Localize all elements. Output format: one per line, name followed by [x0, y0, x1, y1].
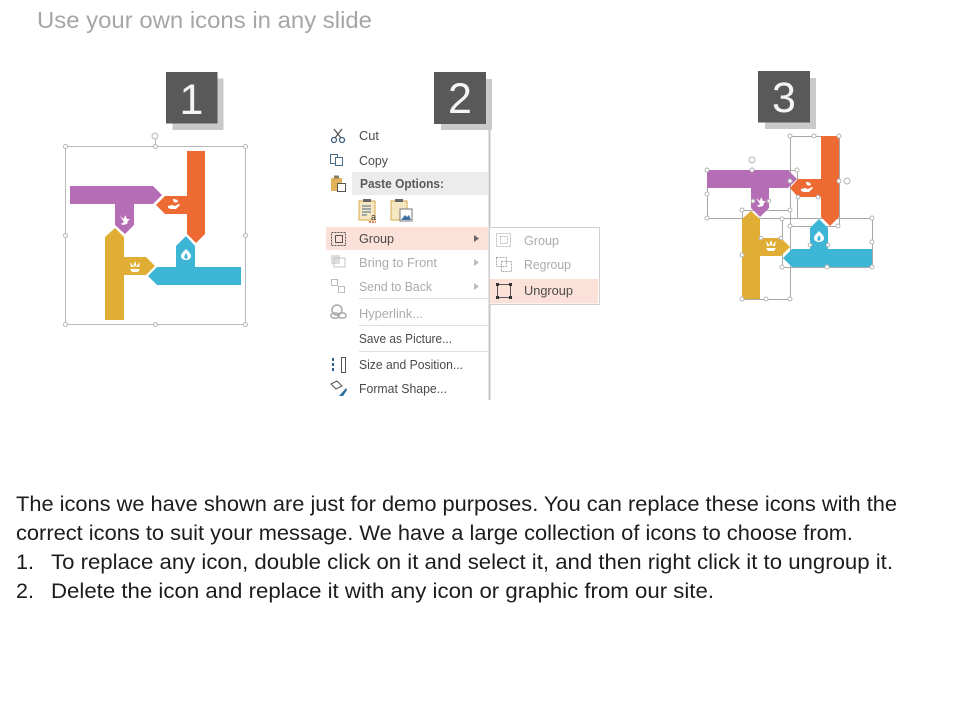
- menu item: Save as Picture: Save as Picture...: [359, 331, 452, 346]
- icon: send to back: [332, 280, 344, 292]
- orange arrow: [156, 151, 205, 243]
- menu item: Size and Position: Size and Position...: [359, 357, 463, 372]
- menu item: Cut: Cut: [359, 128, 379, 143]
- yellow arrow: [742, 211, 790, 299]
- icon: paste picture: [391, 199, 412, 221]
- menu item: Bring to Front: Bring to Front: [359, 255, 437, 270]
- menu item: Hyperlink: Hyperlink...: [359, 306, 423, 321]
- menu item: Copy: Copy: [359, 153, 388, 168]
- blue arrow: [783, 219, 872, 267]
- title: Use your own icons in any slide: [37, 7, 372, 33]
- number badge 1: 1: [180, 76, 203, 124]
- body text block: Delete the icon and replace it with any icon or graphic from our site.: [51, 579, 714, 603]
- menu item: Format Shape: Format Shape...: [359, 381, 447, 396]
- menu vertical edge: [488, 124, 490, 400]
- icon: format shape: [331, 381, 347, 396]
- icon: paste: [331, 176, 346, 192]
- icon: hyperlink: [331, 305, 346, 318]
- submenu panel: Ungroup: [524, 283, 573, 298]
- paste options header: Paste Options:: [360, 176, 444, 191]
- menu item: Send to Back: Send to Back: [359, 279, 432, 294]
- orange arrow: [790, 136, 839, 226]
- panel: step 3 ungrouped graphic: [705, 71, 874, 301]
- yellow arrow: [105, 228, 155, 320]
- body text block: 2.: [16, 579, 34, 603]
- selection frame: [64, 133, 248, 326]
- submenu panel: Regroup: [524, 257, 571, 272]
- submenu panel: Group: [524, 233, 559, 248]
- disabled arrow 1: [474, 259, 479, 266]
- body text block: To replace any icon, double click on it and select it, and then right click it to ungroup it.: [51, 550, 893, 574]
- selection frames: [708, 136, 872, 300]
- blue arrow: [148, 236, 241, 285]
- body text block: [16, 492, 897, 603]
- icon: copy: [330, 154, 342, 166]
- icon: bring to front: [331, 255, 345, 267]
- body text block: correct icons to suit your message. We have a large collection of icons to choose from.: [16, 521, 853, 545]
- number badge 2: 2: [448, 75, 472, 123]
- menu item: Group: Group: [359, 231, 394, 246]
- disabled arrow 2: [474, 283, 479, 290]
- group highlight row: [326, 227, 488, 250]
- paste options header: [352, 172, 488, 195]
- icon: paste keep text: [359, 199, 376, 222]
- submenu panel: [490, 228, 600, 304]
- number badge 2: [434, 72, 492, 130]
- panel: step 1 grouped graphic: [64, 72, 248, 326]
- number badge 1: [166, 72, 224, 130]
- icon: scissors: [332, 129, 344, 142]
- body text block: The icons we have shown are just for demo purposes. You can replace these icons with the: [16, 492, 897, 516]
- icon: group: [332, 232, 346, 246]
- icon: size and position: [333, 358, 346, 372]
- submenu arrow: [474, 235, 479, 242]
- number badge 3: 3: [772, 74, 796, 122]
- purple arrow: [707, 170, 797, 217]
- number badge 3: [758, 71, 816, 129]
- icon: paste keep text: a: [371, 212, 376, 222]
- selection handles: [705, 134, 874, 301]
- body text block: 1.: [16, 550, 34, 574]
- panel: step 2 context menu: [326, 72, 600, 400]
- purple arrow: [70, 186, 162, 234]
